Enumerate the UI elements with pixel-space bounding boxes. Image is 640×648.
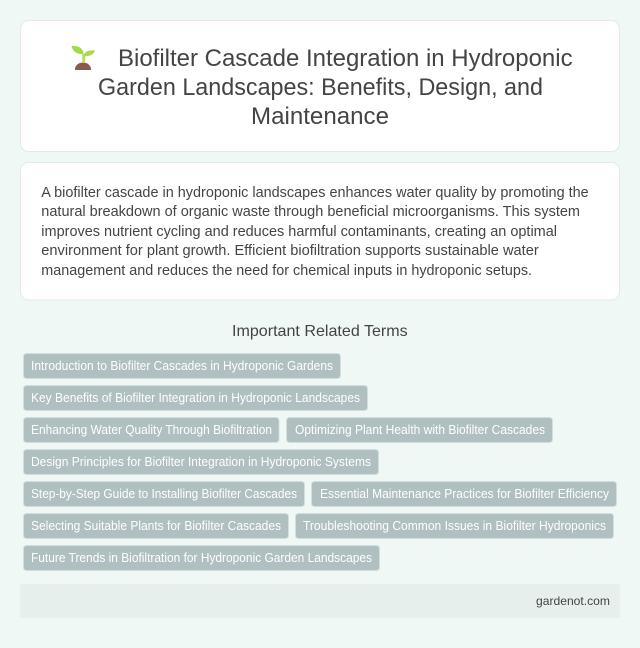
title text: Maintenance [251, 103, 389, 130]
title text: Biofilter Cascade Integration in Hydroponic [118, 45, 573, 72]
panel: description card [20, 162, 620, 300]
tag 3: Enhancing Water Quality Through Biofiltration [31, 423, 272, 437]
description text: natural breakdown of organic waste through beneficial microorganisms. This system [41, 204, 580, 220]
tag 5 [24, 450, 378, 474]
tag 1: Introduction to Biofilter Cascades in Hydroponic Gardens [31, 359, 333, 373]
footer [20, 584, 620, 618]
description text: A biofilter cascade in hydroponic landscapes enhances water quality by promoting the [41, 185, 589, 201]
tag 7 [312, 482, 616, 506]
tag 6: Step-by-Step Guide to Installing Biofilter Cascades [31, 487, 297, 501]
tag 7: Essential Maintenance Practices for Biofilter Efficiency [320, 487, 610, 501]
tag 2 [24, 386, 368, 410]
tag 10 [24, 546, 380, 570]
icon: seedling [72, 46, 95, 70]
panel: title card [20, 20, 620, 152]
tag 2: Key Benefits of Biofilter Integration in Hydroponic Landscapes [31, 391, 360, 405]
tag 4: Optimizing Plant Health with Biofilter Cascades [295, 423, 545, 437]
tag 8: Selecting Suitable Plants for Biofilter Cascades [31, 519, 281, 533]
description text: environment for plant growth. Efficient biofiltration supports sustainable water [41, 243, 539, 259]
tag 1 [24, 354, 340, 378]
description text: management and reduces the need for chemical inputs in hydroponic setups. [41, 263, 532, 279]
title text: Garden Landscapes: Benefits, Design, and [98, 74, 543, 101]
tag 9: Troubleshooting Common Issues in Biofilter Hydroponics [303, 519, 606, 533]
footer: gardenot.com [536, 594, 610, 608]
tag 8 [24, 514, 288, 538]
description text: improves nutrient cycling and reduces harmful contaminants, creating an optimal [41, 224, 557, 240]
tag 5: Design Principles for Biofilter Integration in Hydroponic Systems [31, 455, 371, 469]
description text [41, 185, 589, 279]
tag 10: Future Trends in Biofiltration for Hydroponic Garden Landscapes [31, 551, 372, 565]
tag 4 [286, 418, 552, 442]
heading: important related terms: Important Related Terms [232, 323, 408, 340]
tag 6 [24, 482, 304, 506]
tag list [24, 354, 616, 570]
title text [98, 45, 573, 130]
tag 9 [296, 514, 614, 538]
tag 3 [24, 418, 279, 442]
